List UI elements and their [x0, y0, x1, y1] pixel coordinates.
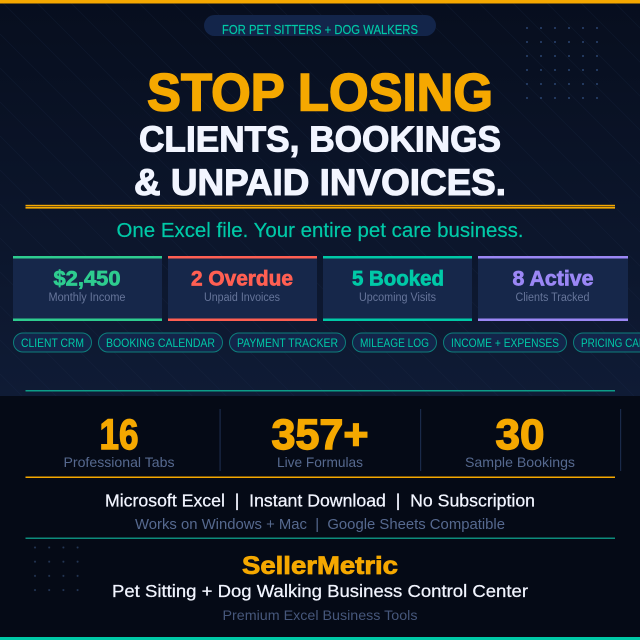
card: overdue invoices — [168, 256, 317, 321]
chip: booking calendar: BOOKING CALENDAR — [106, 336, 215, 350]
stat: professional tabs: 16 — [100, 411, 138, 459]
stat: live formulas: 357+ — [272, 411, 368, 459]
audience pill — [204, 15, 436, 37]
chip: client crm: CLIENT CRM — [21, 336, 84, 350]
stat: professional tabs: Professional Tabs — [64, 454, 174, 470]
background: upper panel — [0, 0, 640, 396]
stat: professional tabs — [64, 411, 174, 470]
stat: live formulas: Live Formulas — [277, 454, 363, 470]
brand tagline: Premium Excel Business Tools — [222, 607, 418, 623]
card: overdue invoices: Unpaid Invoices — [204, 292, 280, 304]
chip: client crm — [14, 333, 92, 352]
card: booked visits: Upcoming Visits — [359, 292, 436, 304]
background: lower panel — [0, 396, 640, 640]
subtitle: One Excel file. Your entire pet care business. — [116, 219, 524, 242]
chip: mileage log: MILEAGE LOG — [360, 336, 429, 350]
card: active clients: Clients Tracked — [516, 292, 590, 304]
stat: sample bookings: Sample Bookings — [465, 454, 575, 470]
stat: sample bookings — [465, 411, 575, 470]
card: booked visits: 5 Booked — [352, 268, 444, 290]
title: & UNPAID INVOICES. — [134, 162, 506, 203]
brand name: SellerMetric — [242, 552, 398, 580]
chip: payment tracker — [230, 333, 346, 352]
stat dividers — [220, 409, 621, 471]
card: active clients — [478, 256, 628, 321]
orange divider — [26, 476, 615, 478]
audience pill: FOR PET SITTERS + DOG WALKERS — [222, 23, 418, 37]
title: CLIENTS, BOOKINGS — [139, 118, 501, 160]
title divider — [26, 205, 615, 209]
product facts: Microsoft Excel | Instant Download | No Subscription — [105, 490, 535, 510]
chip: pricing calculator — [574, 333, 640, 352]
product name: Pet Sitting + Dog Walking Business Control Center — [112, 581, 528, 601]
dot grid: top right — [524, 26, 600, 100]
title: STOP LOSING — [147, 64, 493, 122]
card: active clients: 8 Active — [512, 268, 594, 290]
card: monthly income: $2,450 — [54, 268, 120, 290]
teal divider: above brand — [26, 538, 615, 539]
card: overdue invoices: 2 Overdue — [191, 268, 293, 290]
chip: income and expenses: INCOME + EXPENSES — [451, 336, 559, 350]
chip: income and expenses — [444, 333, 566, 352]
feature chips — [14, 333, 640, 352]
stat: sample bookings: 30 — [496, 411, 544, 459]
dot grid: bottom left — [32, 545, 88, 601]
card: booked visits — [323, 256, 472, 321]
chip: mileage log — [352, 333, 436, 352]
card: monthly income — [13, 256, 162, 321]
compatibility note: Works on Windows + Mac | Google Sheets Compatible — [135, 517, 505, 533]
bottom accent bar — [0, 637, 640, 640]
teal divider: above stats — [26, 390, 615, 392]
chip: booking calendar — [98, 333, 222, 352]
title — [134, 64, 506, 203]
top accent bar — [0, 0, 640, 4]
chip: payment tracker: PAYMENT TRACKER — [237, 336, 338, 350]
card: monthly income: Monthly Income — [48, 292, 126, 304]
